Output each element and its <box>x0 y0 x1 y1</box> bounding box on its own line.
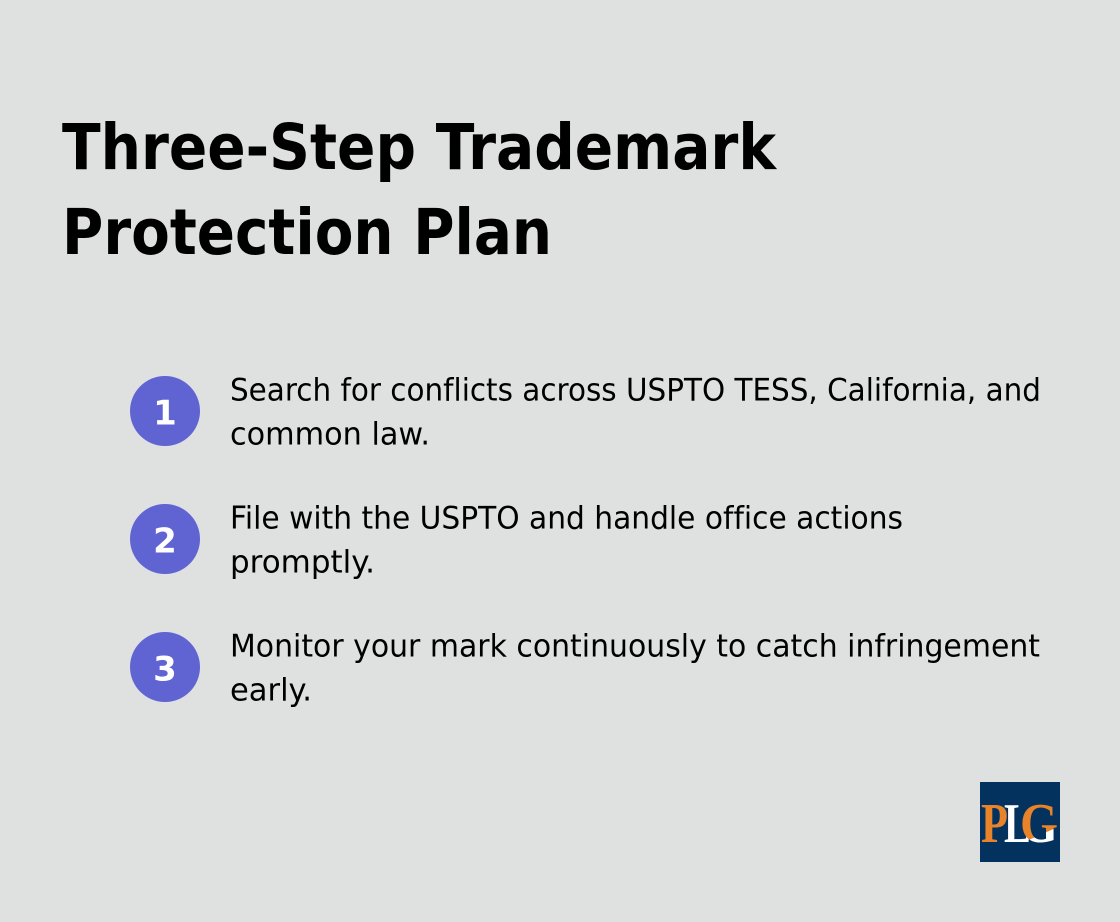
step 2 text: File with the USPTO and handle office actions <box>230 500 903 536</box>
step 3 badge <box>130 632 200 702</box>
step 1 badge: 1 <box>153 394 177 434</box>
logo: PLG: P <box>981 793 1008 855</box>
step 2 text <box>230 500 903 580</box>
step 2 <box>130 500 903 580</box>
step 1 text: common law. <box>230 416 430 452</box>
title: Protection Plan <box>62 196 552 269</box>
step 2 badge: 2 <box>153 522 177 562</box>
step 2 badge <box>130 504 200 574</box>
logo: PLG: G <box>1020 793 1058 855</box>
logo: PLG: G <box>1020 793 1058 855</box>
step 2 text: promptly. <box>230 544 375 580</box>
logo: PLG <box>980 782 1060 862</box>
step 3 text <box>230 628 1040 708</box>
step 3 text: early. <box>230 672 312 708</box>
step 1 text: Search for conflicts across USPTO TESS, California, and <box>230 372 1041 408</box>
step 1 text <box>230 372 1041 452</box>
step 1 badge <box>130 376 200 446</box>
step 3 text: Monitor your mark continuously to catch infringement <box>230 628 1040 664</box>
step 3 badge: 3 <box>153 650 177 690</box>
step 1 <box>130 372 1041 452</box>
logo: PLG: L <box>1004 793 1031 855</box>
title <box>62 111 778 269</box>
step 3 <box>130 628 1040 708</box>
title: Three-Step Trademark <box>62 111 778 184</box>
